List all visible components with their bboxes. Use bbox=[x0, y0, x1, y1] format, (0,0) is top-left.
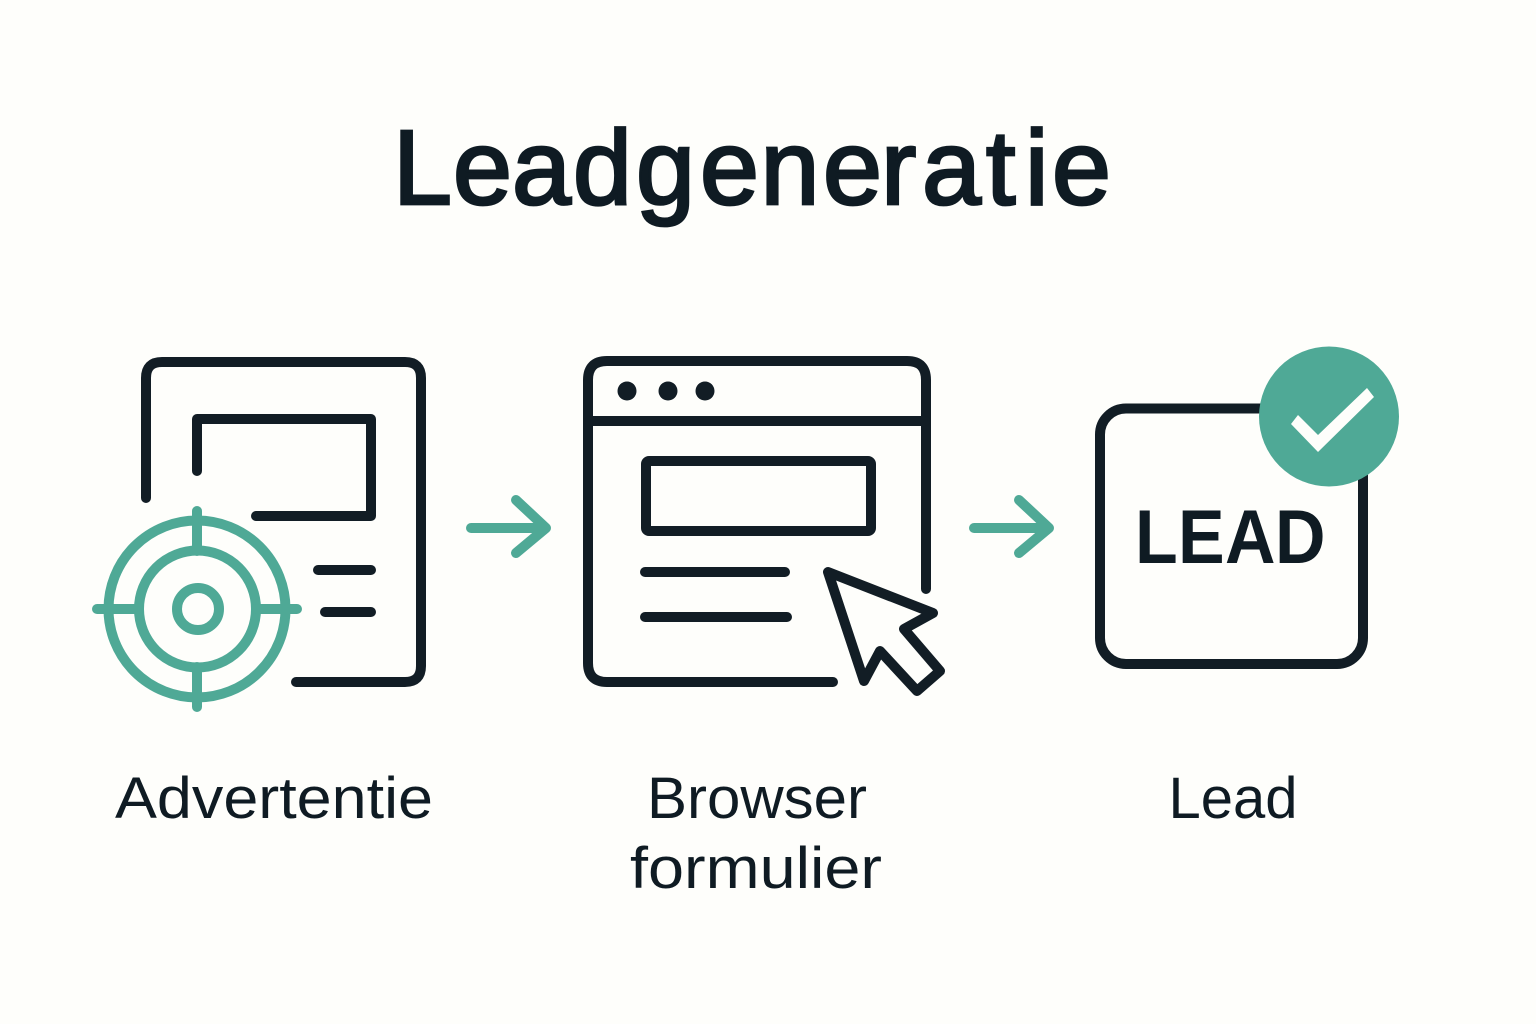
label: Browser formulier: Browser bbox=[647, 766, 867, 831]
arrow: browser to lead bbox=[974, 500, 1049, 553]
title: Leadgeneratie bbox=[393, 109, 1111, 227]
label: Advertentie: Advertentie bbox=[115, 766, 433, 831]
lead card text: LEAD bbox=[1135, 495, 1326, 580]
target symbol bbox=[97, 511, 297, 707]
icon: advertisement with target bbox=[97, 362, 421, 707]
lead card outline bbox=[1100, 408, 1363, 664]
label: Browser formulier: formulier bbox=[630, 836, 882, 901]
browser window dots bbox=[618, 382, 714, 400]
label: Lead: Lead bbox=[1168, 766, 1298, 831]
check badge bbox=[1259, 346, 1399, 486]
advertisement page outline bbox=[146, 362, 421, 682]
browser window outline bbox=[588, 361, 926, 682]
browser title bar divider bbox=[590, 416, 925, 426]
label: Browser formulier bbox=[630, 766, 882, 901]
cursor arrow bbox=[828, 572, 940, 691]
form input box bbox=[646, 461, 871, 531]
check mark bbox=[1291, 388, 1374, 452]
icon: browser form with cursor bbox=[588, 361, 940, 691]
advertisement text lines bbox=[318, 570, 371, 612]
arrow: advertisement to browser bbox=[471, 500, 546, 553]
form text lines bbox=[645, 572, 787, 617]
icon: lead card with check badge bbox=[1100, 346, 1399, 664]
advertisement image frame bbox=[197, 419, 371, 516]
